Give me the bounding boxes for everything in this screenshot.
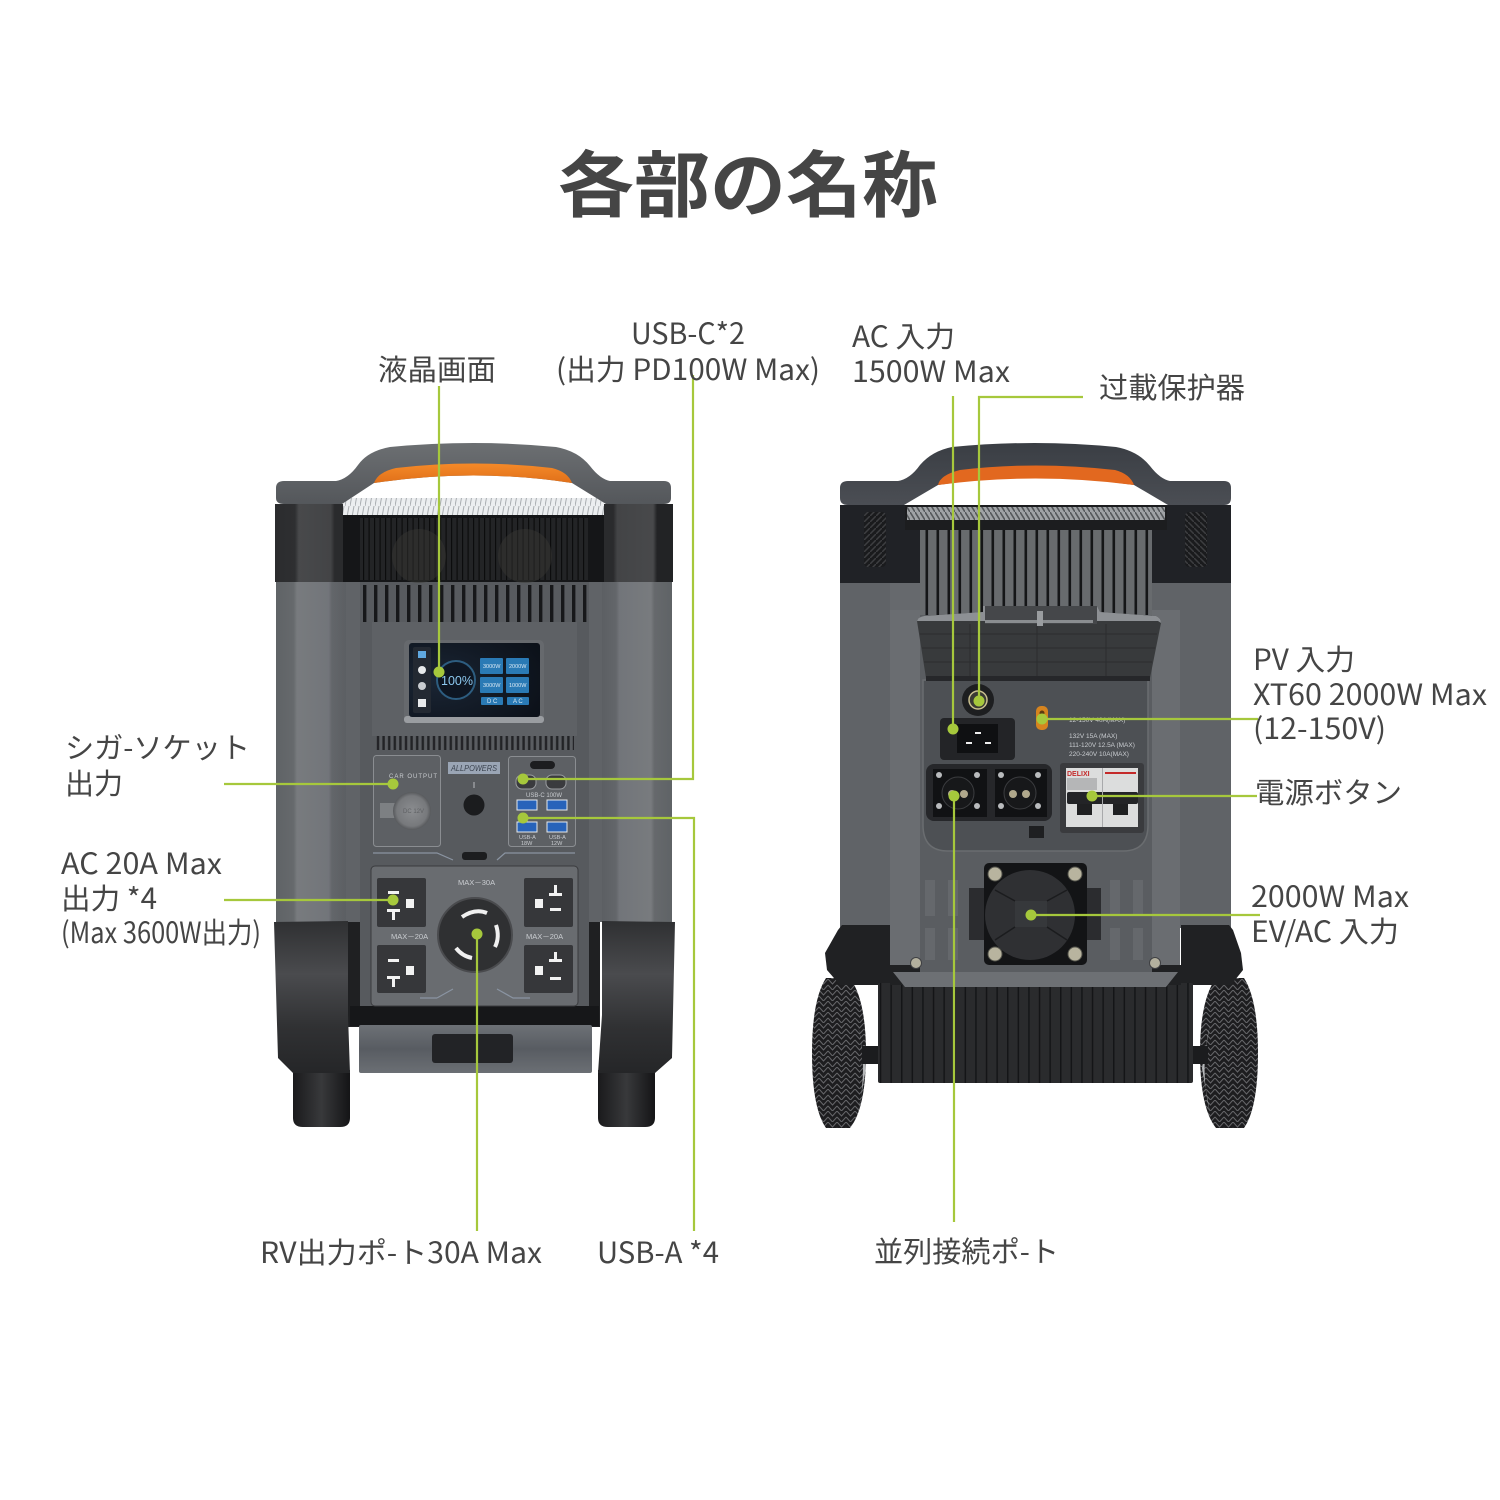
label: RV port: RV出力ポ-ト30A Max [260,1230,542,1272]
usb ports panel: USB-C 100W [526,793,562,799]
power button [464,794,484,816]
label: AC 20A output: AC 20A Max [61,841,222,883]
leader line: AC input [948,396,958,734]
leader line: PV input [1036,714,1258,724]
leader line: LCD screen [434,386,444,678]
power breaker switch [1060,763,1144,833]
label: EV AC input: 2000W Max [1251,874,1409,916]
car socket panel: CAR OUTPUT [389,774,438,780]
label: PV input [1253,637,1487,748]
touch screen: 2000W [509,664,527,670]
usb ports panel: 12W [551,841,563,847]
label: cigarette socket [65,725,250,803]
rating text: 132V 15A (MAX) [1069,733,1117,740]
rating text [1069,717,1135,758]
label: AC input [852,314,1010,391]
label: PV input: (12-150V) [1253,706,1386,748]
label: power button: 電源ボタン [1255,770,1402,812]
usb ports panel: USB-A [519,835,536,841]
rear top dark section [840,505,1231,615]
touch screen: 1000W [509,683,527,689]
label: USB-C: (出力 PD100W Max) [556,347,820,389]
orange grip [938,466,1134,485]
ribbed lower base [878,965,1193,1083]
ac input socket [940,718,1015,760]
rating text: 12-150V 40A(MAX) [1069,717,1125,724]
usb ports panel: USB-A [549,835,566,841]
rear body [840,582,1231,970]
leader line: parallel port [948,790,960,1222]
label: USB-C [556,311,820,389]
rear shoulders [825,925,1243,985]
leader line: power button [1086,790,1257,802]
ac outlet bottom left [377,945,426,993]
label: PV input: PV 入力 [1253,637,1355,679]
leader line: cigarette socket [224,778,398,790]
parallel connection ports [926,764,1052,821]
leader line: USB-A [518,812,694,1231]
ac outlets panel [371,866,578,1006]
label: AC 20A output [61,841,261,952]
label: AC input: AC 入力 [852,314,955,356]
amperage labels [391,878,563,941]
label: LCD screen: 液晶画面 [378,347,496,389]
label: EV AC input [1251,874,1409,951]
small label plate [1029,826,1044,838]
power breaker switch: DELIXI [1067,771,1090,778]
amperage labels: MAX－30A [458,878,495,887]
car socket panel [374,756,440,846]
leader line: RV port [472,928,482,1231]
front legs [293,1070,655,1127]
touch screen: 3000W [483,683,501,689]
ac outlet bottom right [524,945,573,993]
label: AC 20A output: 出力 *4 [61,876,157,918]
rv outlet [438,898,512,972]
leader line: EV AC input [1026,910,1260,920]
touch screen: 3000W [483,664,501,670]
touch screen: 100% [441,674,473,688]
flip-up lid [917,606,1161,681]
xt60 pv input [1036,706,1048,730]
upper vents [363,585,587,622]
handle [276,443,671,504]
label: EV AC input: EV/AC 入力 [1251,909,1399,951]
label: overload protector: 过載保护器 [1099,365,1245,407]
usb ports panel: 18W [521,841,533,847]
label: AC 20A output: (Max 3600W出力) [61,910,261,952]
ac outlet top right [524,878,573,927]
right grip texture [1185,512,1207,567]
label: cigarette socket: シガ-ソケット [65,725,250,767]
left wheel [812,978,880,1128]
label: AC input: 1500W Max [852,349,1010,391]
orange grip [374,464,572,483]
rating text: 111-120V 12.5A (MAX) [1069,742,1135,749]
rear handle [840,443,1231,505]
ac outlet top left [377,878,426,927]
body screws [910,958,1160,968]
front drawer handle [359,1025,592,1073]
car socket panel: DC 12V [403,809,424,815]
touch screen: D C [487,699,498,705]
left grip texture [864,512,886,567]
rating text: 220-240V 10A(MAX) [1069,751,1129,758]
label: parallel port: 並列接続ポ-ト [874,1229,1059,1271]
title: 各部の名称 [558,127,938,232]
right wheel [1190,978,1258,1128]
label: cigarette socket: 出力 [65,761,123,803]
label: USB-A: USB-A *4 [597,1230,719,1272]
lower vents [376,736,574,750]
leader line: AC 20A [224,894,398,906]
usb ports panel [508,756,576,847]
panel: front view of power station [274,443,675,1127]
touch screen: A C [513,699,523,705]
leader line: USB-C [518,375,693,784]
ev ac input port [969,863,1101,965]
power indicator mark [474,782,475,788]
small indicator slot [462,852,487,860]
brand logo: ALLPOWERS [450,764,498,773]
panel accent lines [373,853,575,860]
connector recess panel [923,680,1148,851]
overload protector [962,684,994,716]
panel: rear view of power station [812,443,1258,1128]
label: USB-C: USB-C*2 [631,311,745,353]
amperage labels: MAX－20A [526,932,563,941]
front body [274,582,675,1073]
top dark section with fan grill [275,498,673,583]
embossed side panels [925,880,1143,960]
label: PV input: XT60 2000W Max [1253,672,1487,714]
brand logo [448,762,500,774]
leader line: overload protector [974,397,1083,706]
amperage labels: MAX－20A [391,932,428,941]
touch screen [404,640,544,723]
